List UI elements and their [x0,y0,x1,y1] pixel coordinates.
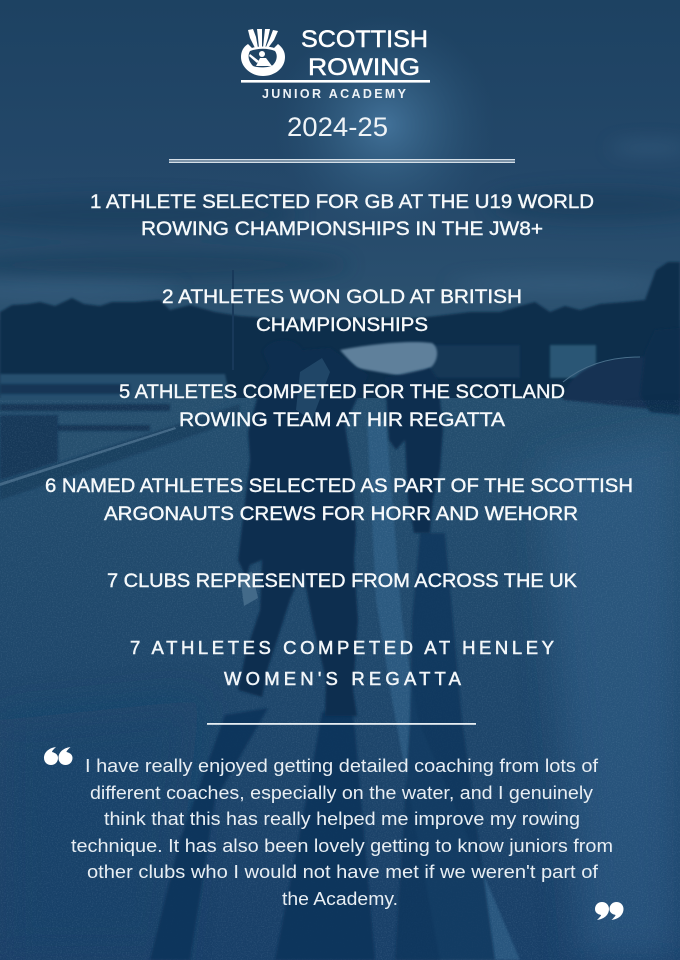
water and dock, left [0,374,230,478]
testimonial quote: different coaches, especially on the water, and I genuinely [90,783,593,803]
main rower [238,340,368,716]
divider above quote [207,723,476,725]
icon: opening quote mark [44,747,72,765]
heading: season: 2024-25 [287,112,388,142]
stat: GB selection: 1 ATHLETE SELECTED FOR GB AT THE U19 WORLD [90,192,594,213]
testimonial quote: technique. It has also been lovely getting to know juniors from [71,836,613,856]
stat: HIR Regatta: ROWING TEAM AT HIR REGATTA [179,410,505,431]
stat: Scottish Argonauts [45,476,633,525]
stat: HIR Regatta [119,382,565,431]
sub brand: JUNIOR ACADEMY [262,87,407,101]
stat: clubs: 7 CLUBS REPRESENTED FROM ACROSS THE UK [107,571,577,592]
stat: GB selection [90,192,594,240]
testimonial quote: I have really enjoyed getting detailed coaching from lots of [85,756,599,776]
testimonial quote: other clubs who I would not have met if we weren't part of [87,862,599,882]
icon: rowing crest [241,29,285,76]
stat: HIR Regatta: 5 ATHLETES COMPETED FOR THE SCOTLAND [119,382,565,403]
stat: Henley Women's Regatta [130,637,554,689]
testimonial quote [71,756,613,909]
stat: British Championships gold: CHAMPIONSHIPS [256,315,428,336]
vehicles, right [550,345,596,378]
stat: Henley Women's Regatta: WOMEN'S REGATTA [224,668,462,689]
icon: closing quote mark [595,902,624,920]
logo [241,26,430,101]
wordmark: SCOTTISH [301,26,428,53]
tree line [0,262,680,400]
stat: British Championships gold: 2 ATHLETES WON GOLD AT BRITISH [162,287,522,308]
testimonial quote: think that this has really helped me improve my rowing [104,809,580,829]
boat hull [340,342,437,378]
testimonial quote: the Academy. [282,889,398,909]
stat: British Championships gold [162,287,522,336]
stat: Scottish Argonauts: ARGONAUTS CREWS FOR HORR AND WEHORR [104,504,578,525]
logo: ROWING [308,54,420,81]
road light patches [0,430,680,960]
top divider [169,159,515,163]
long shadows [150,533,495,960]
stat: Henley Women's Regatta: 7 ATHLETES COMPETED AT HENLEY [130,637,554,658]
stat: Scottish Argonauts: 6 NAMED ATHLETES SELECTED AS PART OF THE SCOTTISH [45,476,633,497]
second rower [385,368,443,533]
stat: GB selection: ROWING CHAMPIONSHIPS IN THE JW8+ [141,219,543,240]
